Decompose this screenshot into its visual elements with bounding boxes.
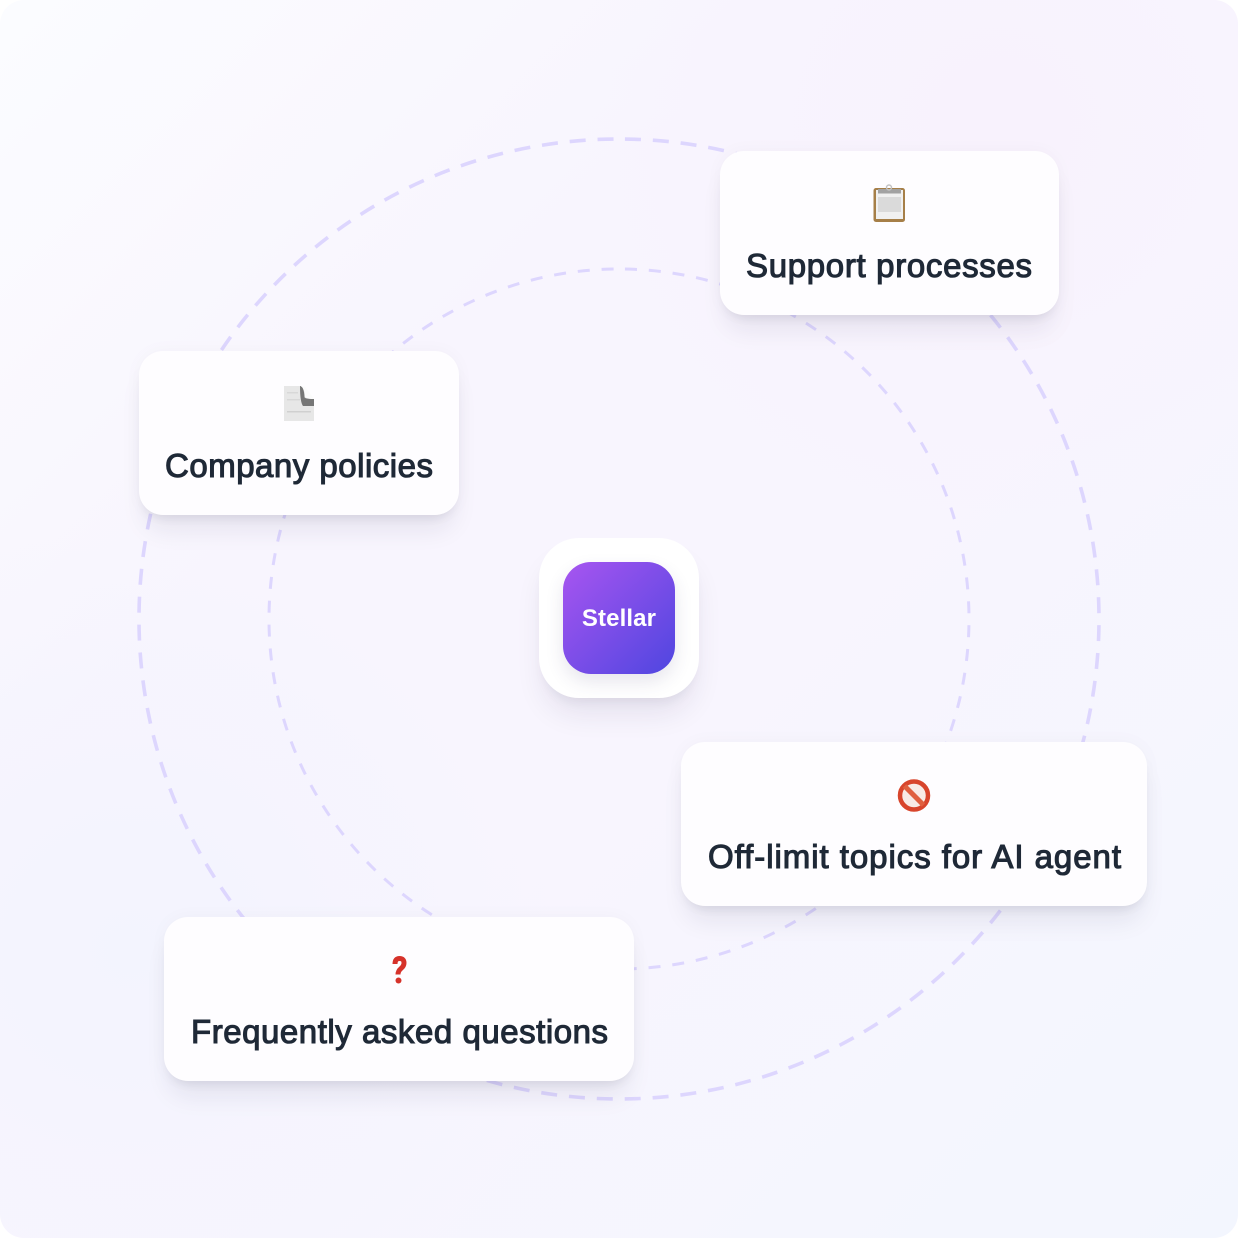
icon: clipboard (874, 185, 905, 222)
label: Company policies (165, 447, 433, 484)
icon: question mark (395, 958, 404, 984)
card: frequently asked questions (164, 917, 634, 1081)
card: company policies (139, 351, 459, 515)
label: Support processes (746, 247, 1032, 284)
card: off-limit topics (681, 742, 1147, 906)
centre logo tile (539, 538, 699, 698)
label: Frequently asked questions (191, 1013, 608, 1050)
Stellar logo (563, 562, 675, 674)
icon: prohibited (900, 782, 928, 810)
card: support processes (720, 151, 1059, 315)
Stellar logo: Stellar (582, 605, 656, 632)
label: Off-limit topics for AI agent (708, 838, 1121, 875)
icon: document (284, 386, 314, 421)
